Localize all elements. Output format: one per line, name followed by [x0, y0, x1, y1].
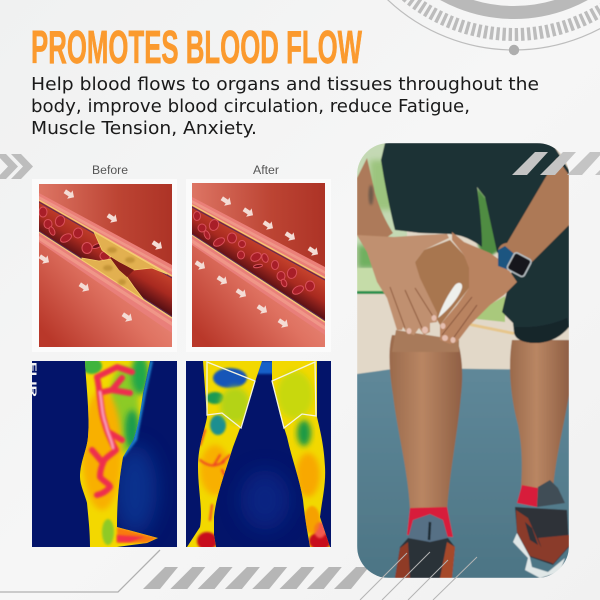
FLIR watermark: FLIR [28, 362, 38, 398]
left sock [407, 507, 453, 537]
panel: thermal image single leg [28, 355, 177, 551]
right leg [510, 340, 569, 490]
background foliage [357, 143, 514, 335]
left arm [357, 158, 394, 238]
description text [31, 74, 539, 139]
photo top stripes [512, 152, 600, 175]
description text: Help blood flows to organs and tissues throughout the [31, 74, 539, 95]
right sock [517, 485, 538, 507]
background road [357, 368, 569, 578]
flow arrows [193, 194, 321, 330]
bottom left corner line [0, 550, 160, 592]
icon: chevrons left [0, 154, 33, 179]
plaque [82, 232, 167, 300]
photo: man holding knee [357, 143, 569, 578]
left leg [389, 335, 462, 510]
lower knee [392, 330, 459, 352]
label: before: Before [92, 165, 128, 177]
right arm [498, 158, 569, 262]
dial decoration top right [330, 0, 600, 55]
shorts [381, 143, 569, 343]
smartwatch [498, 246, 532, 278]
panel: after artery [192, 183, 325, 347]
panel: before artery [32, 179, 177, 352]
left shoe [395, 514, 455, 578]
left hand [357, 234, 449, 335]
bottom stripes [143, 567, 369, 589]
blood cells [194, 212, 314, 296]
thigh outlines [207, 362, 316, 428]
description text: Muscle Tension, Anxiety. [31, 118, 257, 139]
right shoe [513, 480, 569, 578]
blood cells [39, 207, 110, 260]
knee [415, 240, 470, 325]
white patch [438, 283, 462, 318]
right hand [440, 232, 517, 344]
panel: thermal image both legs [186, 361, 331, 550]
description text: body, improve blood circulation, reduce Fatigue, [31, 96, 470, 117]
hot veins [92, 367, 132, 495]
thin diagonal lines [360, 552, 477, 600]
label: after: After [253, 165, 279, 177]
flow arrows [37, 187, 165, 324]
